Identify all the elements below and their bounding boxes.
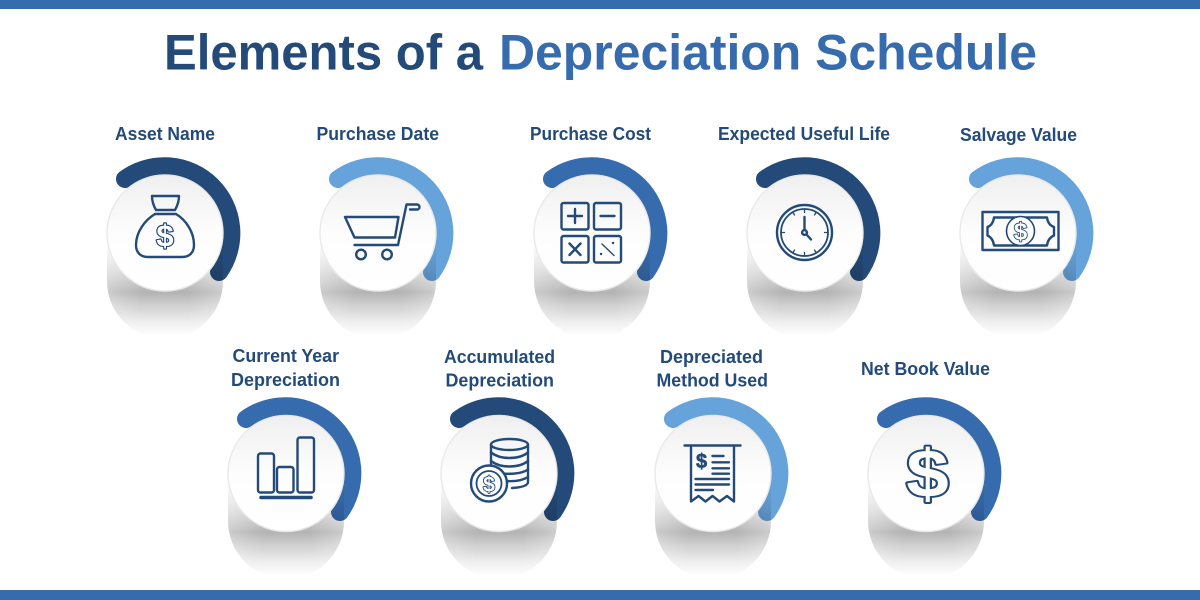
item: Accumulated Depreciation (441, 347, 565, 579)
icon: money bag: $ (156, 218, 174, 253)
icon: receipt (684, 446, 740, 502)
item: Current Year Depreciation (228, 346, 352, 579)
icon: coins (471, 439, 528, 502)
item: Expected Useful Life (718, 124, 890, 339)
shadow (655, 491, 771, 570)
icon: bar chart (258, 438, 314, 498)
item: Asset Name (107, 124, 231, 339)
item: Net Book Value (861, 359, 992, 579)
icon: receipt: $ (696, 451, 707, 473)
icon: dollar sign: $ (906, 437, 949, 512)
ring (978, 166, 1084, 272)
disc (747, 175, 863, 291)
icon: coins: $ (483, 474, 495, 496)
label: Current Year Depreciation: Current Year (232, 346, 339, 366)
disc (320, 175, 436, 291)
item: Salvage Value (960, 125, 1084, 339)
item: Purchase Date (316, 124, 444, 339)
ring (125, 166, 231, 272)
label: Depreciated Method Used: Method Used (656, 370, 768, 390)
shadow (747, 251, 863, 330)
shadow (534, 251, 650, 330)
ring (673, 406, 779, 512)
label: Current Year Depreciation: Depreciation (231, 370, 340, 390)
label: Current Year Depreciation (231, 346, 340, 390)
disc (107, 175, 223, 291)
item: Purchase Cost (530, 124, 658, 339)
disc (960, 175, 1076, 291)
disc (655, 416, 771, 532)
ring (246, 406, 352, 512)
label: Asset Name: Asset Name (115, 124, 215, 144)
title: Elements of a (164, 24, 484, 80)
icon: calculator keys (562, 203, 621, 262)
shadow (320, 251, 436, 330)
ring (459, 406, 565, 512)
title: Depreciation Schedule (499, 24, 1037, 80)
icon: clock (777, 205, 832, 260)
label: Net Book Value: Net Book Value (861, 359, 990, 379)
icon: money bag (136, 196, 194, 257)
label: Salvage Value: Salvage Value (960, 125, 1077, 145)
disc (441, 416, 557, 532)
shadow (107, 251, 223, 330)
item: Depreciated Method Used (655, 347, 779, 579)
icon: shopping cart (345, 204, 420, 259)
disc (228, 416, 344, 532)
shadow (441, 491, 557, 570)
ring (338, 166, 444, 272)
icon: banknote (982, 212, 1058, 250)
label: Accumulated Depreciation (444, 347, 555, 390)
label: Accumulated Depreciation: Accumulated (444, 347, 555, 367)
disc (534, 175, 650, 291)
icon: banknote: $ (1014, 218, 1028, 246)
ring (552, 166, 658, 272)
ring (765, 166, 871, 272)
shadow (960, 251, 1076, 330)
disc (868, 416, 984, 532)
label: Purchase Cost: Purchase Cost (530, 124, 651, 144)
label: Accumulated Depreciation: Depreciation (446, 370, 554, 390)
label: Purchase Date: Purchase Date (316, 124, 439, 144)
shadow (228, 491, 344, 570)
top bar (0, 0, 1200, 9)
label: Expected Useful Life: Expected Useful Life (718, 124, 890, 144)
bottom bar (0, 590, 1200, 600)
ring (886, 406, 992, 512)
title (164, 24, 1037, 80)
label: Depreciated Method Used (656, 347, 768, 390)
shadow (868, 491, 984, 570)
label: Depreciated Method Used: Depreciated (660, 347, 763, 367)
